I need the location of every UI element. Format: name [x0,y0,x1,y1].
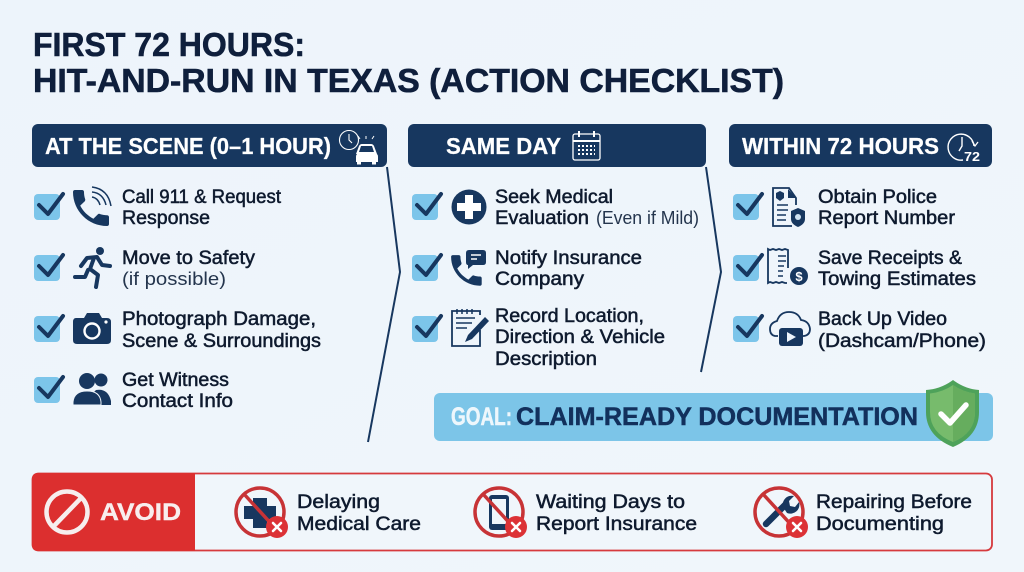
item: witness contact: Contact Info [122,391,233,412]
item: save receipts: Save Receipts & [818,248,962,269]
avoid badge [32,473,195,551]
title: FIRST 72 HOURS: [33,27,305,64]
item: notify insurance: Company [495,269,585,290]
item: photograph damage: Scene & Surroundings [122,331,321,352]
avoid item: delaying medical care [236,488,421,538]
item: photograph damage [34,309,321,352]
item: record location [412,306,665,370]
item: call 911: Response [122,208,210,229]
avoid panel [32,473,992,551]
header: same day [408,124,706,167]
item: police report: Obtain Police [818,187,937,208]
icon: prohibition sign [46,492,88,532]
icon: green shield [926,380,979,447]
item: medical evaluation: (Even if Mild) [596,208,699,228]
avoid item: waiting days: Report Insurance [536,513,697,535]
item: medical evaluation [412,187,699,229]
item: save receipts: $ [795,269,803,284]
item: record location: Description [495,349,597,370]
item: photograph damage: Photograph Damage, [122,309,316,330]
item: call 911: Call 911 & Request [122,187,282,208]
goal banner: GOAL: [451,403,512,431]
item: save receipts [733,248,976,290]
avoid badge: AVOID [100,499,181,526]
header: within 72 hours [729,124,992,167]
avoid item: repairing before documenting [755,488,972,538]
divider arrow: same day to 72 hours [701,167,721,372]
panel: at the scene [32,124,400,442]
header: at the scene: AT THE SCENE (0–1 HOUR) [45,133,331,159]
item: move to safety [34,247,256,289]
icon: 72 hour clock: 72 [964,150,980,164]
icon: 72 hour clock [948,134,980,164]
header: same day: SAME DAY [446,133,561,159]
item: medical evaluation: Evaluation [495,208,589,229]
divider arrow: scene to same day [368,167,400,442]
item: back up video: (Dashcam/Phone) [818,331,986,352]
avoid item: repairing before documenting: Documenting [816,513,944,535]
title [33,27,784,100]
icon: calendar [573,131,600,160]
goal banner: CLAIM-READY DOCUMENTATION [516,403,918,431]
avoid item: delaying medical care: Delaying [297,491,380,513]
item: move to safety: Move to Safety [122,248,256,269]
header: within 72 hours: WITHIN 72 HOURS [742,133,939,159]
avoid item: waiting days: Waiting Days to [536,491,685,513]
panel: within 72 hours [729,124,992,352]
item: witness contact: Get Witness [122,370,229,391]
item: notify insurance: Notify Insurance [495,248,642,269]
item: move to safety: (if possible) [122,269,226,289]
item: notify insurance [412,248,642,290]
item: call 911 [34,187,282,229]
item: police report [733,187,956,229]
item: back up video: Back Up Video [818,309,947,330]
item: medical evaluation: Seek Medical [495,187,613,208]
item: record location: Record Location, [495,306,644,327]
item: record location: Direction & Vehicle [495,327,665,348]
item: witness contact [34,370,233,412]
item: back up video [733,309,986,352]
icon: clock and police car [340,130,378,164]
title: HIT-AND-RUN IN TEXAS (ACTION CHECKLIST) [33,63,784,100]
item: police report: Report Number [818,208,956,229]
avoid item: delaying medical care: Medical Care [297,513,421,535]
avoid item: repairing before documenting: Repairing Before [816,491,972,513]
header: at the scene [32,124,387,167]
panel: same day [408,124,721,372]
item: save receipts: Towing Estimates [818,269,976,290]
avoid item: waiting days [475,488,697,538]
goal banner [434,380,993,447]
